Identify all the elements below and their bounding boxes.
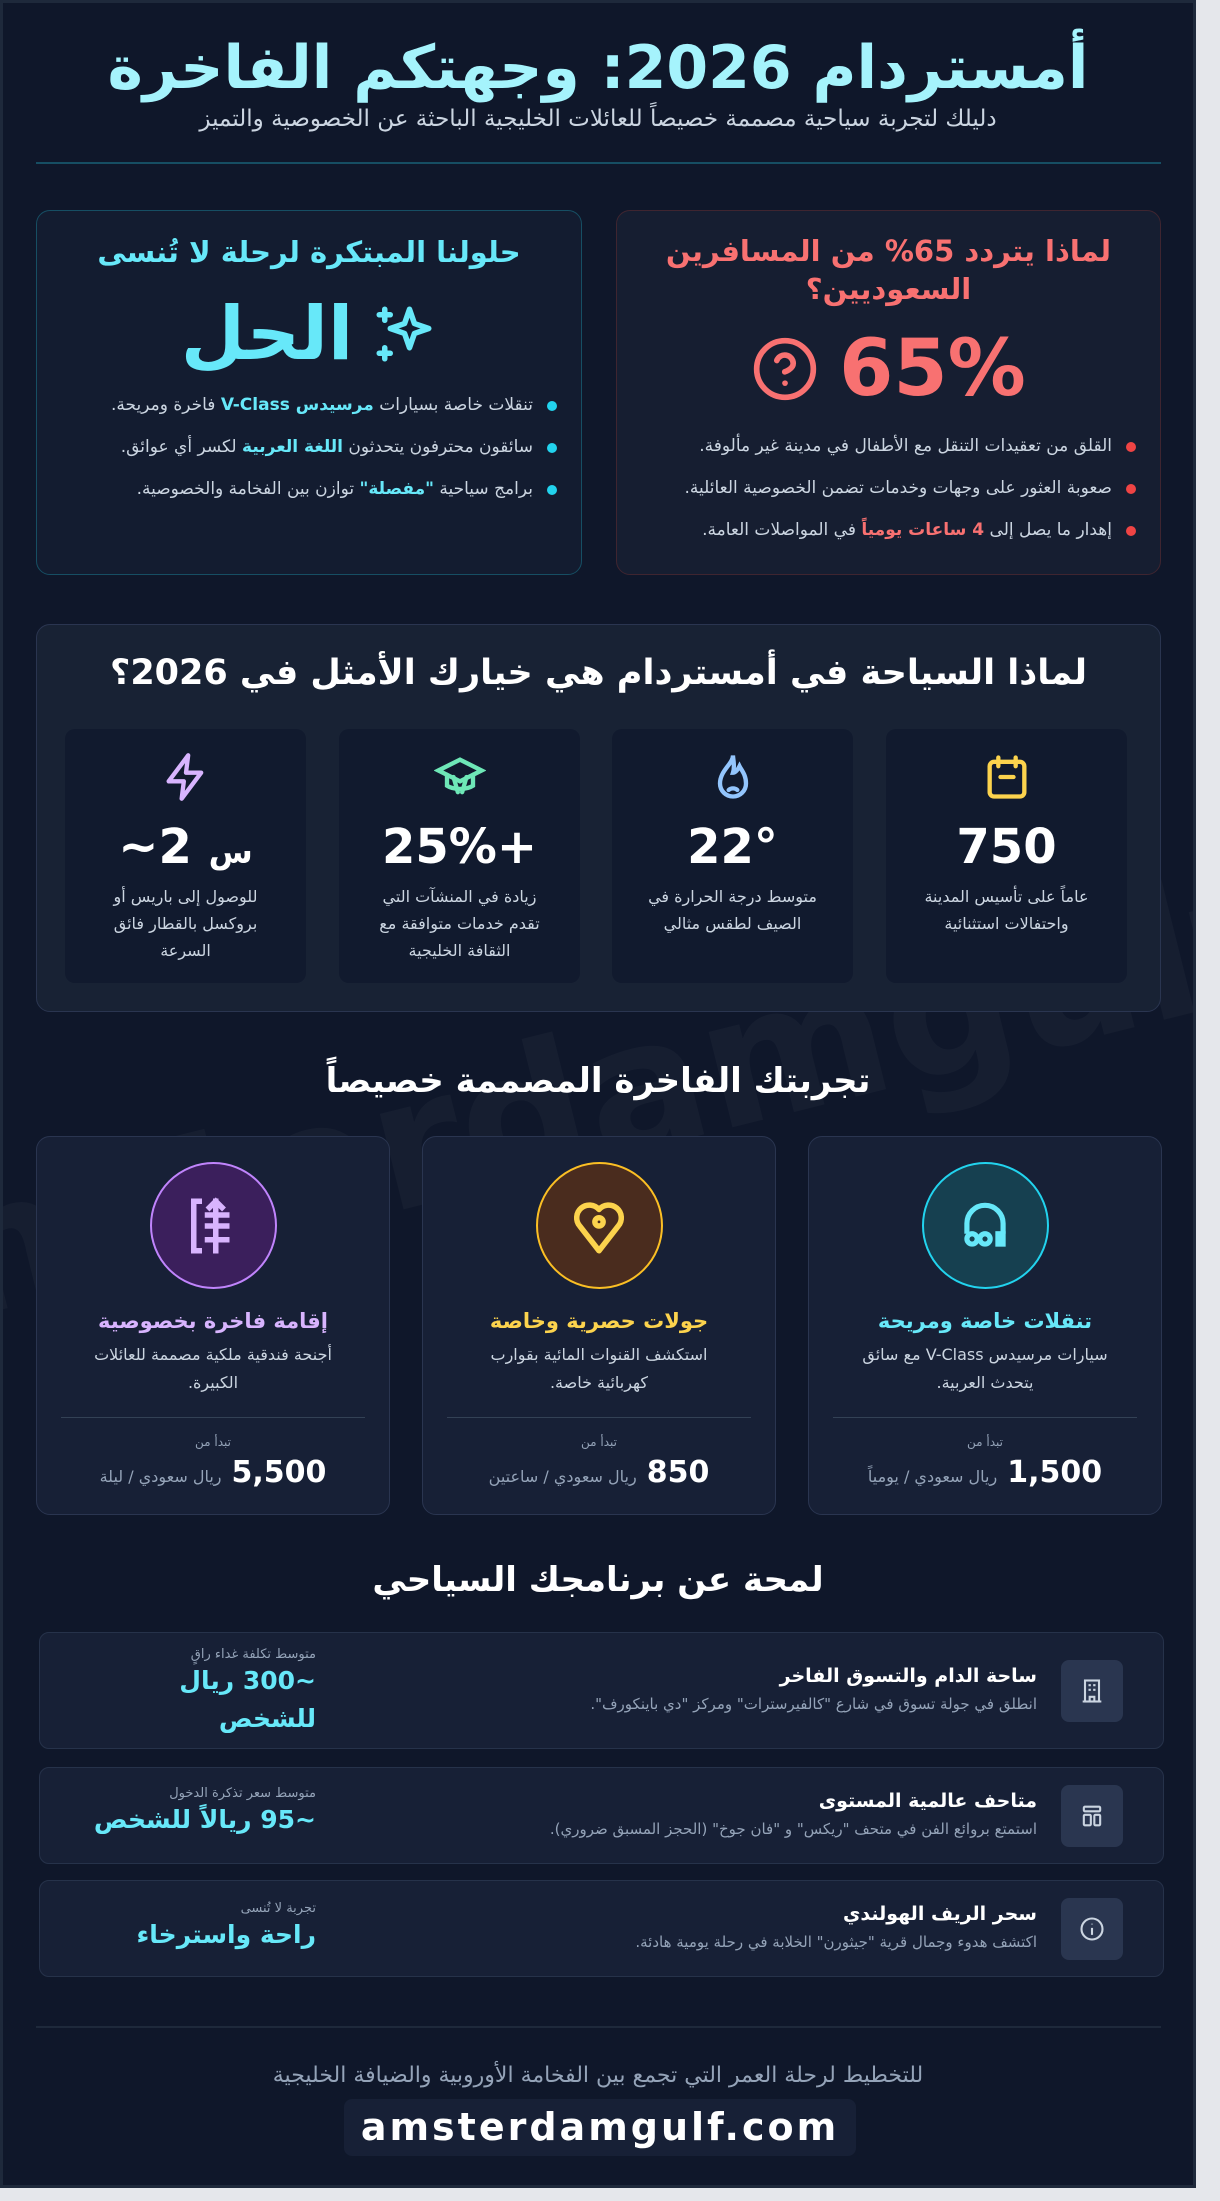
solution bullets: تنقلات خاصة بسيارات مرسيدس V-Class فاخرة ومريحة. [111,395,533,415]
problem stat: 65% [839,324,1026,414]
icon: info [1061,1898,1123,1960]
solution bullets: برامج سياحية "مفصلة" توازن بين الفخامة والخصوصية. [137,479,533,499]
stat: 2h [65,729,306,983]
card: stay: أجنحة فندقية ملكية مصممة للعائلات الكبيرة. [94,1345,332,1392]
row: countryside [39,1880,1164,1977]
row: countryside: اكتشف هدوء وجمال قرية "جيثورن" الخلابة في رحلة يومية هادئة. [635,1933,1037,1951]
row: dam square [39,1632,1164,1749]
panel: problem [616,210,1161,575]
card: tours: استكشف القنوات المائية بقوارب كهربائية خاصة. [490,1345,707,1392]
panel: solution [36,210,582,575]
problem bullets: صعوبة العثور على وجهات وخدمات تضمن الخصوصية العائلية. [684,478,1112,498]
heading: itinerary: لمحة عن برنامجك السياحي [372,1560,824,1600]
stat: 22: 22° [687,819,778,875]
icon: hotel [150,1162,276,1289]
footer text: للتخطيط لرحلة العمر التي تجمع بين الفخامة الأوروبية والضيافة الخليجية [273,2063,923,2088]
icon: building [1061,1660,1123,1722]
icon: headset [922,1162,1048,1289]
heading: experience: تجربتك الفاخرة المصممة خصيصاً [326,1061,870,1101]
card: tours: 850ريال سعودي / ساعتين [489,1455,709,1490]
card: transport: تنقلات خاصة ومريحة [878,1309,1092,1333]
row: dam square: ساحة الدام والتسوق الفاخر [780,1665,1037,1687]
card: stay: إقامة فاخرة بخصوصية [98,1309,328,1333]
solution bullets: سائقون محترفون يتحدثون اللغة العربية لكسر أي عوائق. [121,437,533,457]
card: transport: تبدأ من [967,1435,1003,1449]
stat: 2h: ~2 س [118,819,253,875]
why heading: لماذا السياحة في أمستردام هي خيارك الأمثل في 2026؟ [110,653,1087,693]
card: tours: جولات حصرية وخاصة [490,1309,708,1333]
row: dam square: متوسط تكلفة غداء راقٍ [191,1647,316,1662]
row: countryside: سحر الريف الهولندي [843,1903,1037,1925]
row: dam square: انطلق في جولة تسوق في شارع "كالفيرسترات" ومركز "دي باينكورف". [590,1695,1037,1713]
row: countryside: تجربة لا تُنسى [241,1901,316,1916]
stat: 22 [612,729,853,983]
stat: 750: عاماً على تأسيس المدينة واحتفالات استثنائية [924,887,1089,933]
icon: heart [536,1162,662,1289]
stat: 2h: للوصول إلى باريس أو بروكسل بالقطار فائق السرعة [114,887,257,960]
row: countryside: راحة واسترخاء [137,1920,316,1949]
row: museums: متوسط سعر تذكرة الدخول [169,1786,316,1801]
card: transport: سيارات مرسيدس V-Class مع سائق يتحدث العربية. [862,1345,1108,1392]
stat: 750 [886,729,1127,983]
card: stay: تبدأ من [195,1435,231,1449]
solution bullets [111,395,557,499]
stat: 25%: زيادة في المنشآت التي تقدم خدمات متوافقة مع الثقافة الخليجية [379,887,540,960]
row: museums [39,1767,1164,1864]
solution stat: الحل [181,291,353,377]
card: tours: تبدأ من [581,1435,617,1449]
panel: why amsterdam [36,624,1161,1012]
solution heading: حلولنا المبتكرة لرحلة لا تُنسى [97,235,521,269]
footer url: amsterdamgulf.com [361,2105,839,2149]
row: museums: استمتع بروائع الفن في متحف "ريكس" و "فان جوخ" (الحجز المسبق ضروري). [550,1820,1037,1838]
problem stat [754,324,1026,414]
subtitle: دليلك لتجربة سياحية مصممة خصيصاً للعائلات الخليجية الباحثة عن الخصوصية والتميز [199,106,997,132]
stat: 25%: 25%+ [382,819,537,875]
title: أمستردام 2026: وجهتكم الفاخرة [108,33,1088,103]
problem bullets: القلق من تعقيدات التنقل مع الأطفال في مدينة غير مألوفة. [699,436,1112,456]
card: stay [36,1136,390,1515]
card: tours [422,1136,776,1515]
stat: 22: متوسط درجة الحرارة في الصيف لطقس مثالي [648,887,817,933]
problem heading: لماذا يتردد 65% من المسافرين السعوديين؟ [666,234,1111,306]
problem bullets [684,434,1136,540]
row: museums: متاحف عالمية المستوى [819,1790,1037,1812]
stat: 25% [339,729,580,983]
solution stat [181,291,432,377]
problem bullets: إهدار ما يصل إلى 4 ساعات يومياً في المواصلات العامة. [702,520,1112,540]
row: dam square: ~300 ريال للشخص [179,1666,316,1732]
row: museums: ~95 ريالاً للشخص [94,1805,316,1834]
card: stay: 5,500ريال سعودي / ليلة [100,1455,326,1490]
card: transport [808,1136,1162,1515]
icon: layout [1061,1785,1123,1847]
card: transport: 1,500ريال سعودي / يومياً [868,1455,1102,1490]
stat: 750: 750 [956,819,1057,875]
